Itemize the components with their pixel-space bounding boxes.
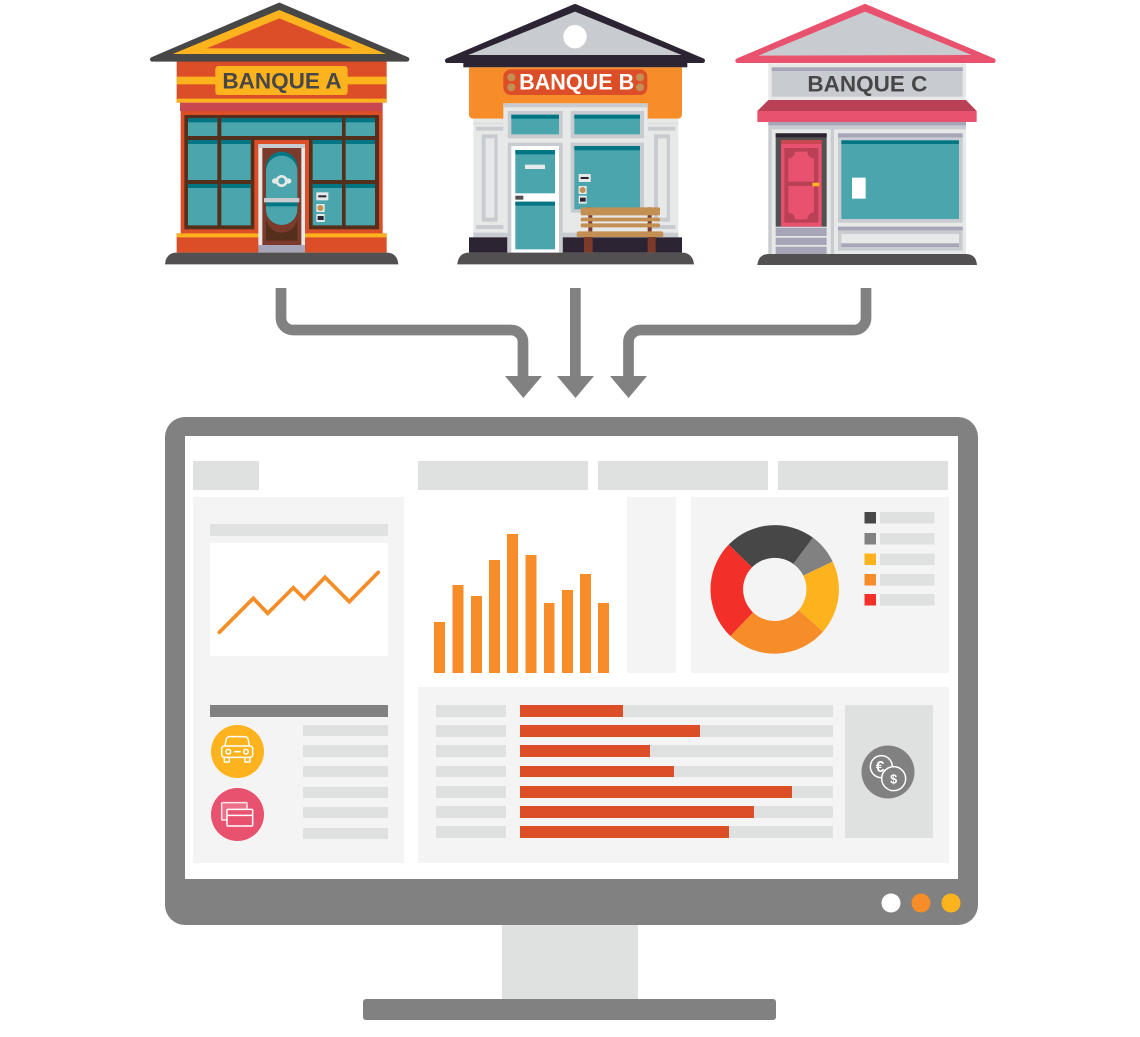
ground [757,254,977,265]
line chart [210,543,388,656]
panel: left column [193,497,404,863]
roof [738,6,993,61]
arrow: bank A to dashboard [281,288,542,398]
bench [577,207,663,253]
panel: donut chart [691,497,949,673]
plinth [177,233,387,253]
door [776,133,827,254]
sign band: BANQUE B [519,69,634,94]
storefront [180,103,383,234]
awning [757,100,977,122]
door [254,140,309,253]
list placeholders [303,725,388,839]
panel: narrow placeholder [627,497,676,673]
monitor [165,417,978,925]
icon: car [211,725,264,778]
ground [457,253,694,264]
icon: bank cards [211,788,264,841]
bar chart [434,534,609,673]
currency box [845,705,933,838]
plinth [469,237,682,253]
icon: coins: € [876,759,885,776]
arrow: bank B to dashboard [557,288,594,398]
monitor stand [363,925,776,1020]
windows [508,111,644,213]
monitor buttons [882,894,960,912]
wall [768,122,966,254]
bank B building [447,6,703,264]
bar values [520,705,792,838]
roof [152,5,407,59]
bar tracks [520,705,833,838]
icon: coins: $ [890,772,897,786]
sign: BANQUE C [807,72,927,97]
legend [864,512,934,606]
donut chart [710,525,839,654]
panel: horizontal bars [418,687,949,863]
sign band [177,60,387,103]
bank C building [738,6,993,265]
walls and columns [473,119,678,237]
bank A building [152,5,407,264]
window [838,133,963,251]
arrow: bank C to dashboard [610,288,866,398]
sign [768,63,966,100]
door [508,143,563,253]
sign band [469,67,682,120]
sign band: BANQUE A [222,69,342,94]
roof [447,6,703,67]
dashboard header tabs [193,461,948,490]
row labels [436,705,506,838]
ground [165,253,398,264]
icon: coins [862,746,914,798]
